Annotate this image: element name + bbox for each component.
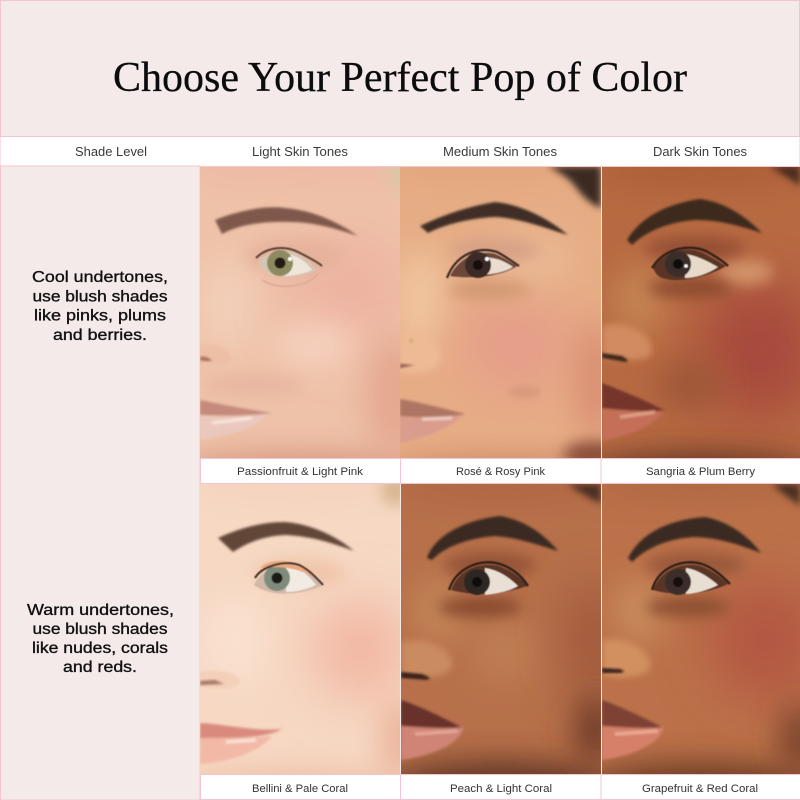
title: Choose Your Perfect Pop of Color: [113, 55, 687, 101]
eye: [652, 248, 728, 280]
caption: rose: Rosé & Rosy Pink: [456, 466, 545, 478]
header: medium skin tones: Medium Skin Tones: [443, 144, 557, 159]
eye: [254, 561, 323, 594]
photo: light skin, warm undertone: [200, 484, 400, 774]
caption: bellini: Bellini & Pale Coral: [252, 783, 348, 795]
photo: dark skin, warm undertone: [602, 484, 800, 774]
text: cool undertones: [32, 269, 168, 344]
eye: [449, 562, 528, 595]
caption: peach: Peach & Light Coral: [450, 783, 552, 795]
eyebrow: [627, 199, 762, 245]
nose: [200, 346, 229, 362]
eyebrow: [420, 202, 568, 235]
eyebrow: [215, 207, 358, 236]
photo: medium skin, cool undertone: [400, 167, 601, 458]
eye: [652, 562, 730, 595]
panel: shade level column: [0, 166, 200, 800]
lips: [602, 383, 665, 441]
caption: grapefruit: Grapefruit & Red Coral: [642, 783, 758, 795]
lips: [200, 400, 272, 440]
nose: [200, 671, 240, 689]
eye: [447, 250, 519, 278]
text: warm undertones: use blush shades: [32, 621, 168, 638]
caption: sangria: Sangria & Plum Berry: [646, 466, 756, 478]
text: warm undertones: and reds.: [63, 659, 137, 676]
lips: [200, 723, 282, 764]
text: warm undertones: Warm undertones,: [27, 602, 174, 619]
header: dark skin tones: Dark Skin Tones: [653, 144, 747, 159]
header: light skin tones: Light Skin Tones: [252, 144, 348, 159]
photo: light skin, cool undertone: [200, 167, 400, 458]
nose: [602, 324, 652, 362]
text: cool undertones: use blush shades: [32, 288, 168, 306]
text: cool undertones: and berries.: [53, 327, 147, 344]
text: warm undertones: like nudes, corals: [32, 640, 168, 657]
eyebrow: [218, 522, 354, 552]
title banner: [0, 0, 800, 136]
eyebrow: [628, 517, 761, 562]
lips: [401, 700, 464, 760]
photo: dark skin, cool undertone: [602, 167, 800, 458]
caption row: warm undertones: [200, 774, 800, 800]
text: cool undertones: Cool undertones,: [32, 269, 168, 286]
text: warm undertones: [27, 602, 174, 676]
caption row: cool undertones: [200, 458, 800, 484]
header: shade level: Shade Level: [75, 144, 147, 159]
column header row: [0, 136, 800, 166]
eye: [256, 248, 322, 286]
lips: [602, 700, 664, 760]
photo: medium skin, warm undertone: [401, 484, 601, 774]
caption: passionfruit: Passionfruit & Light Pink: [237, 466, 364, 478]
hair: [548, 166, 601, 208]
lips: [400, 399, 466, 443]
eyebrow: [427, 516, 558, 560]
nose: [401, 641, 452, 680]
nose with stud: [400, 338, 440, 373]
text: cool undertones: like pinks, plums: [34, 308, 166, 324]
nose: [602, 639, 650, 677]
